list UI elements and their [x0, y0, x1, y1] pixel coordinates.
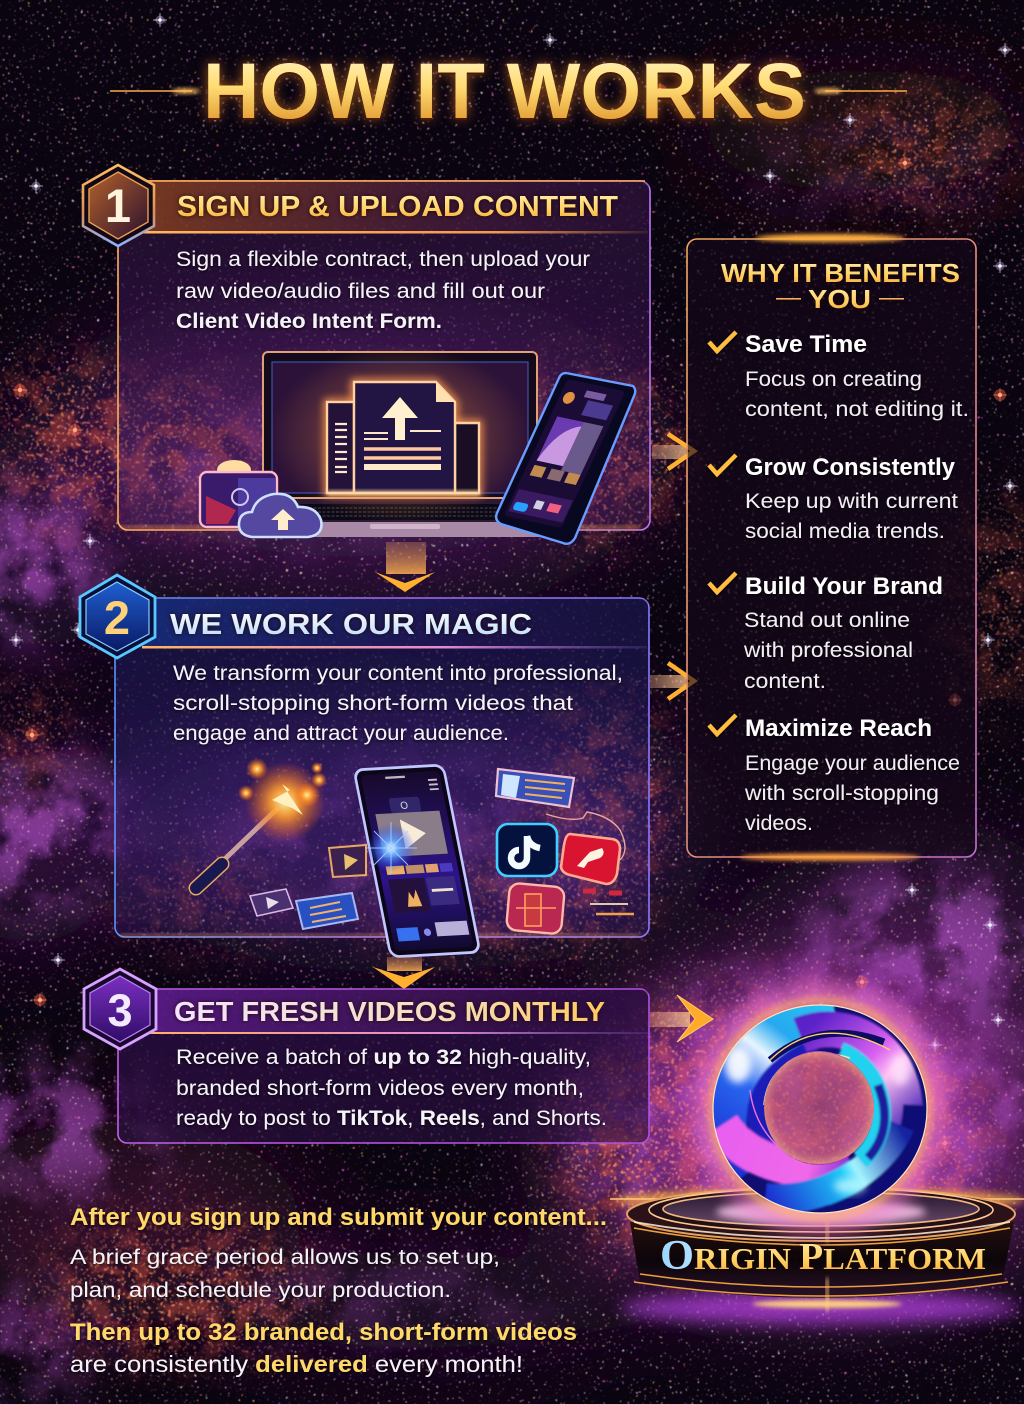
title: HOW IT WORKS	[203, 46, 806, 135]
step 3 description: Receive a batch of up to 32 high-quality,	[176, 1045, 591, 1069]
step 2 description	[173, 661, 623, 745]
logo: glossy twisted ring	[704, 993, 936, 1225]
benefit: grow consistently: social media trends.	[745, 519, 945, 543]
illustration: smartphone with content	[496, 373, 635, 544]
step 1 description: Client Video Intent Form.	[176, 309, 442, 333]
illustration: smartphone with video player: O	[399, 800, 409, 812]
benefit: save time: Save Time	[745, 331, 867, 358]
icon: TikTok	[497, 824, 557, 876]
icons: floating video thumbnails	[250, 845, 366, 929]
step 3 heading: GET FRESH VIDEOS MONTHLY	[174, 996, 605, 1027]
icon: upload cloud	[239, 494, 321, 537]
number badge 1: 1	[105, 179, 131, 232]
connector arrow: step 2 to benefits	[650, 663, 694, 699]
connector arrow: step 1 to benefits	[652, 434, 694, 469]
pedestal label: origin platform: ORIGIN PLATFORM	[660, 1233, 986, 1279]
connector arrow: step 2 to step 3	[373, 957, 435, 989]
step 1 heading: SIGN UP & UPLOAD CONTENT	[177, 191, 618, 223]
benefits heading	[721, 258, 960, 314]
benefit: build your brand: with professional	[743, 638, 913, 662]
closing note: are consistently delivered every month!	[70, 1351, 523, 1377]
icon: floating content card	[496, 769, 574, 807]
closing note: A brief grace period allows us to set up,	[70, 1245, 500, 1269]
panel: why it benefits you	[687, 234, 976, 860]
step 3 description: branded short-form videos every month,	[176, 1076, 584, 1100]
illustration: laptop with uploading documents	[244, 345, 562, 537]
sparkle on phone	[365, 822, 417, 874]
benefit: save time	[709, 331, 969, 421]
benefit: build your brand: Stand out online	[744, 608, 910, 632]
icon: pink app	[506, 883, 565, 934]
illustration: magic wand with sparks	[196, 758, 327, 888]
icon: media card	[200, 460, 277, 527]
benefit: save time: content, not editing it.	[745, 397, 969, 421]
pedestal	[610, 1187, 1024, 1324]
number badge 2: 2	[104, 591, 130, 644]
step 1 description: raw video/audio files and fill out our	[176, 279, 545, 303]
benefits heading: YOU	[808, 284, 871, 314]
closing note: Then up to 32 branded, short-form videos	[70, 1319, 577, 1346]
step 3 description: ready to post to TikTok, Reels, and Shorts.	[176, 1106, 607, 1130]
benefit: build your brand: content.	[744, 669, 826, 693]
benefit: maximize reach	[709, 715, 960, 835]
benefit: grow consistently	[709, 454, 958, 543]
closing note: plan, and schedule your production.	[70, 1278, 451, 1302]
icon: red app	[561, 834, 620, 884]
step 1 description	[176, 247, 590, 333]
benefit: maximize reach: with scroll-stopping	[744, 781, 939, 805]
illustration: smartphone with video player	[354, 765, 480, 957]
closing note: After you sign up and submit your content...	[70, 1204, 607, 1231]
step 2 description: scroll-stopping short-form videos that	[173, 691, 573, 715]
benefits heading: WHY IT BENEFITS	[721, 258, 960, 288]
benefit: maximize reach: Maximize Reach	[745, 715, 932, 742]
step 2 description: We transform your content into professional,	[173, 661, 623, 685]
step 1 description: Sign a flexible contract, then upload your	[176, 247, 590, 271]
benefit: maximize reach: Engage your audience	[745, 751, 960, 775]
benefit: build your brand	[709, 573, 943, 693]
step 3 description	[176, 1045, 607, 1130]
number badge 2	[80, 575, 155, 658]
step 2 heading: WE WORK OUR MAGIC	[170, 609, 532, 641]
panel: step 3 get fresh videos monthly	[118, 989, 649, 1143]
connector arrow: step 3 to origin platform	[650, 995, 713, 1042]
benefit: build your brand: Build Your Brand	[745, 573, 943, 600]
benefit: grow consistently: Keep up with current	[745, 489, 958, 513]
number badge 3	[84, 969, 156, 1049]
number badge 3: 3	[107, 985, 133, 1036]
benefit: save time: Focus on creating	[745, 367, 922, 391]
closing note	[70, 1204, 607, 1377]
number badge 1	[83, 165, 154, 246]
icon: small chart tags	[546, 812, 634, 914]
connector arrow: step 1 to step 2	[375, 542, 435, 592]
benefit: maximize reach: videos.	[745, 811, 813, 835]
step 2 description: engage and attract your audience.	[173, 721, 509, 745]
benefit: grow consistently: Grow Consistently	[745, 454, 956, 481]
